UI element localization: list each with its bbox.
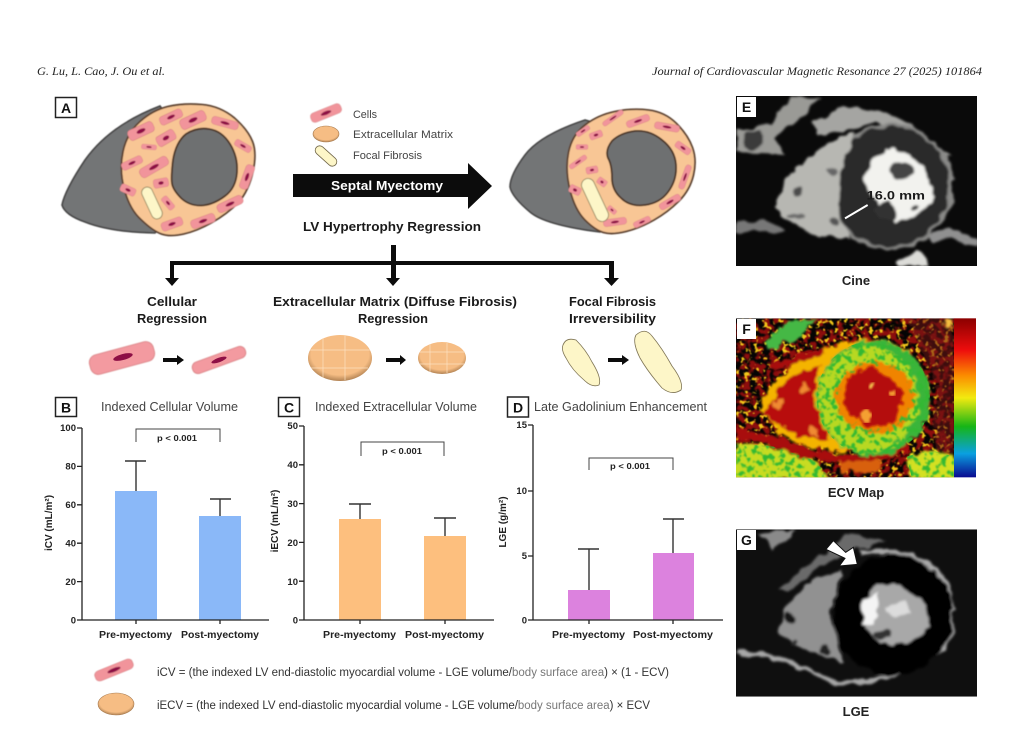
- heading: focal fibrosis irreversibility: Focal Fibrosis: [569, 295, 656, 309]
- bar chart: iCV: 20: [65, 577, 76, 588]
- bar chart: iCV: [44, 423, 269, 641]
- icon: focal fibrosis persists: [562, 331, 682, 393]
- bar chart: LGE: 0: [522, 616, 527, 626]
- bar chart: iCV: p < 0.001: [157, 433, 197, 443]
- bar chart: iECV: [270, 421, 494, 641]
- heading: cellular regression: Regression: [137, 312, 207, 326]
- heading: LV hypertrophy regression: LV Hypertrophy Regression: [303, 220, 481, 234]
- panel D label: [508, 397, 528, 417]
- panel A label: [56, 98, 76, 118]
- running header: authors: G. Lu, L. Cao, J. Ou et al.: [37, 66, 165, 78]
- caption: ECV map: ECV Map: [828, 485, 884, 500]
- septal thickness line: [845, 205, 868, 218]
- panel A label: A: [61, 100, 71, 116]
- legend text: focal fibrosis: Focal Fibrosis: [353, 150, 422, 162]
- bar chart: LGE: p < 0.001: [610, 461, 650, 471]
- caption: LGE: LGE: [843, 704, 870, 719]
- panel F label: [737, 319, 756, 339]
- bar chart: iECV: 30: [287, 499, 298, 510]
- heading: extracellular matrix regression: [273, 295, 517, 326]
- panel F: ECV map: [733, 318, 976, 480]
- bar chart: iCV: iCV (mL/m²): [44, 495, 55, 551]
- legend icon: focal fibrosis: [313, 144, 339, 168]
- heading: extracellular matrix regression: Regression: [358, 312, 428, 326]
- panel E: cine MRI: [736, 96, 977, 266]
- arrow: septal myectomy: Septal Myectomy: [331, 179, 443, 193]
- bar chart: LGE: [498, 420, 723, 641]
- measurement text: 16.0 mm: [867, 189, 925, 203]
- panel B label: B: [61, 400, 71, 416]
- panel D label: D: [513, 400, 523, 416]
- panel C title: Indexed Extracellular Volume: [315, 400, 477, 414]
- formula: iECV: iECV = (the indexed LV end-diastolic myocardial volume - LGE volume/body surface area) × ECV: [157, 700, 650, 712]
- panel E label: E: [742, 99, 751, 115]
- heart before myectomy: [62, 104, 256, 236]
- panel B label: [56, 398, 76, 416]
- bar chart: LGE: 15: [516, 420, 528, 431]
- arrow: LGE finding: [826, 541, 857, 566]
- running header: journal: Journal of Cardiovascular Magnetic Resonance 27 (2025) 101864: [652, 66, 982, 78]
- heading: focal fibrosis irreversibility: Irreversibility: [569, 312, 656, 326]
- panel C label: [278, 398, 300, 416]
- bar chart: iECV: 0: [293, 616, 298, 626]
- panel F label: F: [742, 321, 751, 337]
- panel G label: G: [741, 532, 752, 548]
- legend text: extracellular matrix: Extracellular Matrix: [353, 129, 454, 141]
- bar chart: LGE: Post-myectomy: [633, 630, 713, 641]
- bar chart: iECV: 10: [287, 577, 298, 588]
- bar chart: iECV: 40: [287, 460, 298, 471]
- panel B title: Indexed Cellular Volume: [101, 400, 238, 414]
- panel C label: C: [284, 400, 294, 416]
- formula icon: cell: [93, 658, 135, 682]
- bar chart: LGE: 10: [516, 486, 527, 497]
- panel D title: Late Gadolinium Enhancement: [534, 400, 708, 414]
- caption: cine: Cine: [842, 273, 870, 288]
- bar chart: iCV: 100: [60, 423, 76, 434]
- bar chart: iCV: 60: [65, 500, 76, 511]
- bar chart: iCV: 40: [65, 538, 76, 550]
- heading: focal fibrosis irreversibility: [569, 295, 656, 326]
- icon: extracellular matrix shrinks: [308, 335, 466, 381]
- legend icon: extracellular matrix: [313, 126, 339, 142]
- bar chart: LGE: Pre-myectomy: [552, 630, 625, 641]
- bar chart: iCV: Post-myectomy: [181, 630, 259, 641]
- icon: cell shrinks: [88, 340, 247, 376]
- formula icon: extracellular matrix: [98, 693, 134, 715]
- panel G: LGE MRI: [736, 529, 977, 697]
- bar chart: LGE: LGE (g/m²): [498, 496, 509, 548]
- bar chart: iECV: Pre-myectomy: [323, 630, 396, 641]
- branching arrows: [165, 245, 619, 286]
- heading: extracellular matrix regression: Extracellular Matrix (Diffuse Fibrosis): [273, 295, 517, 309]
- panel E label: [737, 97, 756, 117]
- heading: cellular regression: [137, 295, 207, 326]
- legend icon: cell: [309, 102, 343, 124]
- panel G label: [737, 530, 756, 550]
- heart after myectomy: [510, 109, 695, 234]
- arrow: septal myectomy: [293, 163, 492, 209]
- bar chart: iECV: iECV (mL/m²): [270, 490, 281, 552]
- bar chart: iCV: 0: [71, 616, 76, 626]
- bar chart: iCV: 80: [65, 462, 76, 472]
- bar chart: iECV: 50: [287, 421, 298, 432]
- bar chart: iECV: 20: [287, 538, 298, 549]
- formula: iCV: iCV = (the indexed LV end-diastolic myocardial volume - LGE volume/body surface area) × (1 - ECV): [157, 667, 669, 679]
- legend: [309, 102, 454, 168]
- legend text: cells: Cells: [353, 109, 377, 121]
- bar chart: LGE: 5: [522, 551, 528, 562]
- bar chart: iCV: Pre-myectomy: [99, 630, 172, 641]
- bar chart: iECV: Post-myectomy: [405, 630, 484, 641]
- heading: cellular regression: Cellular: [147, 295, 197, 309]
- bar chart: iECV: p < 0.001: [382, 446, 422, 456]
